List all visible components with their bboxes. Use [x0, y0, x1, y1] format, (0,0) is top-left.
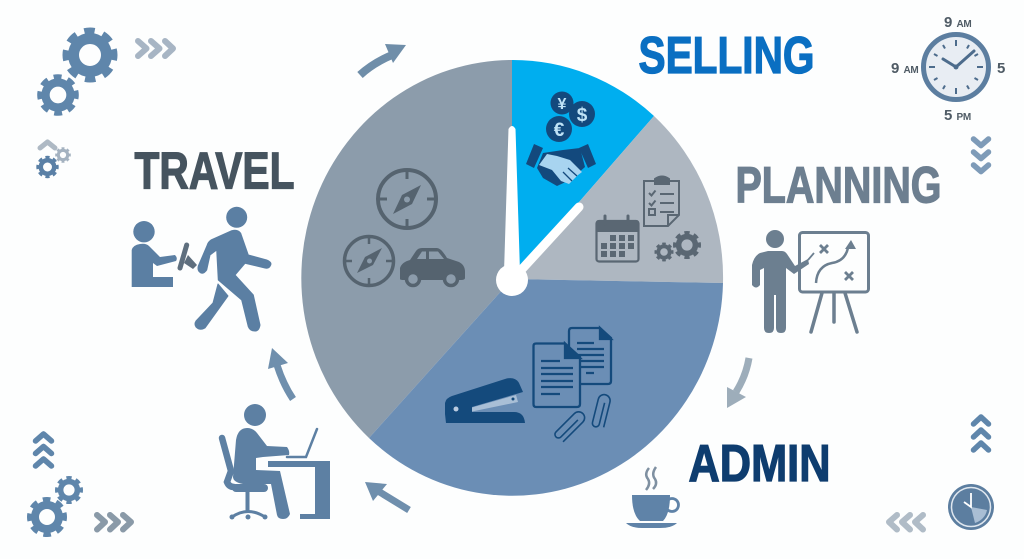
- icon: coffee cup: [626, 467, 678, 528]
- clock labels: 5: [997, 60, 1005, 77]
- walking person: [195, 207, 271, 331]
- arrow: top: [360, 44, 406, 75]
- slice: travel: [301, 60, 512, 438]
- chevrons: bottom-left right-pointing: [97, 515, 131, 530]
- icon: planner at board: [752, 230, 868, 333]
- slice: selling: [512, 60, 654, 279]
- icon: currency coins: [546, 92, 595, 142]
- pie clock chart: [301, 60, 723, 496]
- chevrons: top-left right-pointing: [138, 41, 173, 56]
- tool: [180, 245, 197, 269]
- icon: person at desk: [222, 404, 330, 520]
- heading: admin: ADMIN: [688, 435, 830, 493]
- icon: stapler: [445, 378, 525, 423]
- arrow: right: [727, 358, 749, 408]
- icon: wall clock: [924, 34, 988, 100]
- icon: large compass: [378, 170, 436, 228]
- icon: handshake: [526, 144, 596, 186]
- icon: car: [400, 248, 465, 286]
- icon: currency coins: $: [577, 105, 588, 126]
- seated person: [132, 221, 177, 287]
- icon: small compass: [344, 236, 394, 286]
- icon: paper clips: [554, 393, 611, 443]
- clock hands: [496, 126, 579, 296]
- arrow: left: [268, 348, 293, 399]
- clock labels: 9 AM: [891, 60, 918, 77]
- icon: planning gears: [656, 233, 699, 260]
- icon: bottom-left gears: [29, 478, 81, 535]
- clock labels: [891, 14, 1005, 124]
- icon: person traveling: [132, 207, 271, 331]
- heading: planning: PLANNING: [736, 156, 942, 214]
- icon: top-left gears: [40, 31, 114, 113]
- chevrons: right down-pointing: [974, 139, 988, 172]
- arrow: bottom: [365, 482, 409, 510]
- icon: documents: [534, 328, 611, 407]
- icon: checklist clipboard: [644, 176, 679, 226]
- heading: selling: SELLING: [638, 27, 814, 85]
- clock labels: 5 PM: [944, 107, 971, 124]
- icon: currency coins: €: [554, 120, 565, 141]
- heading: travel: TRAVEL: [134, 142, 294, 200]
- chevrons: right up-pointing: [974, 417, 988, 450]
- icon: small gears with chevron: [38, 142, 70, 177]
- chevrons: bottom-right left-pointing: [889, 515, 923, 530]
- slice: admin: [369, 279, 723, 496]
- slice: planning: [512, 116, 723, 283]
- clock labels: 9 AM: [944, 14, 971, 31]
- icon: calendar: [596, 216, 639, 262]
- icon: small clock bottom-right: [948, 484, 994, 530]
- chevrons: bottom-left up-pointing: [36, 434, 52, 466]
- icon: currency coins: ¥: [558, 96, 567, 113]
